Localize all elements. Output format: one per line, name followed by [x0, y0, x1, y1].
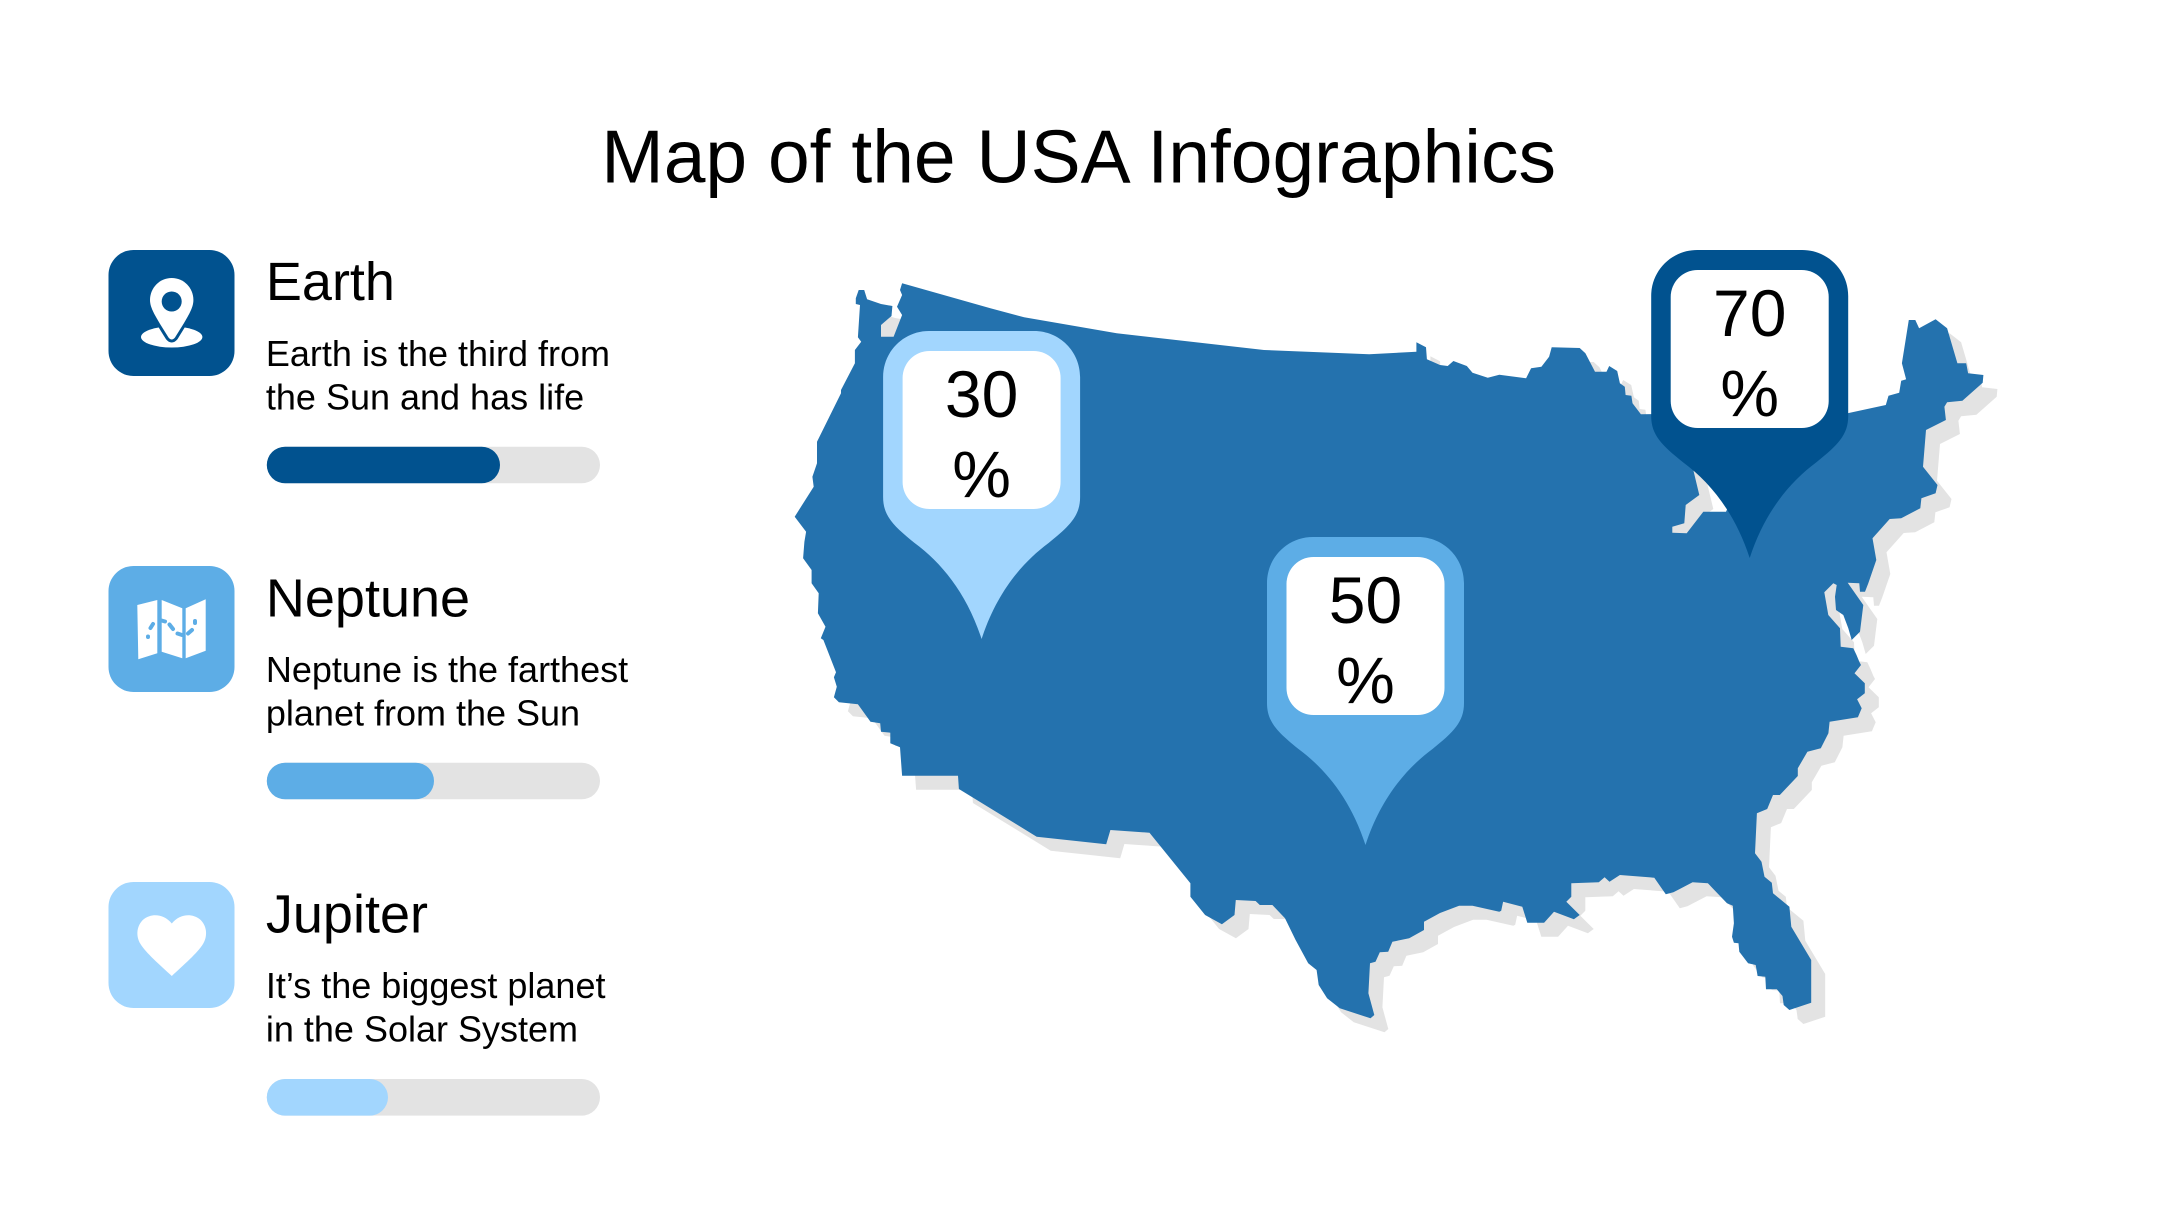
map pin: 70%: %	[1720, 356, 1779, 430]
text: Neptune description: planet from the Sun	[266, 692, 580, 733]
text: Jupiter description: It’s the biggest planet	[266, 965, 605, 1006]
text: Earth description: the Sun and has life	[266, 376, 584, 417]
map pin: 50%	[1267, 537, 1464, 845]
map pin: 30%	[883, 331, 1080, 639]
heading: Earth: Earth	[266, 252, 395, 312]
map pin: 70%: 70	[1713, 276, 1786, 350]
panel: Earth	[108, 250, 610, 483]
text: Jupiter description: in the Solar System	[266, 1008, 578, 1049]
map pin: 30%: 30	[945, 357, 1018, 431]
icon: location pin	[108, 250, 234, 376]
map pin: 50%: %	[1336, 643, 1395, 717]
heading: Jupiter: Jupiter	[266, 884, 428, 944]
heading: Neptune: Neptune	[266, 568, 470, 628]
icon: folded map	[108, 566, 234, 692]
progress bar: Neptune	[267, 763, 600, 799]
panel: Neptune	[108, 566, 628, 799]
text: Neptune description: Neptune is the farthest	[266, 649, 628, 690]
icon: heart	[108, 882, 234, 1008]
title: Map of the USA Infographics	[601, 115, 1556, 199]
progress bar: Jupiter	[267, 1079, 600, 1116]
panel: Jupiter	[108, 882, 605, 1116]
map of the USA	[795, 283, 1997, 1032]
map pin: 70%	[1651, 250, 1848, 558]
map pin: 30%: %	[952, 437, 1011, 511]
progress bar: Earth	[267, 447, 600, 483]
text: Earth description: Earth is the third from	[266, 333, 610, 374]
map pin: 50%: 50	[1329, 563, 1402, 637]
